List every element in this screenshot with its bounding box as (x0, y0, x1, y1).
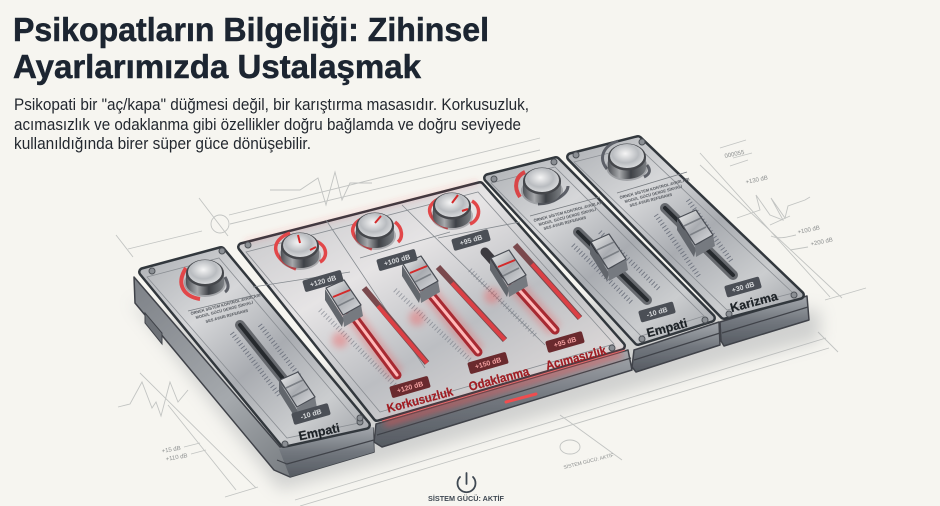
fader: Korkusuzluk (320, 280, 427, 385)
bottom value tag 1 (389, 376, 431, 398)
top value tag 1: +120 dB (309, 275, 337, 289)
fader (232, 325, 317, 419)
channel name: Empati (645, 316, 689, 340)
scale labels right: +130 dB (745, 175, 768, 186)
bottom value tag 1: +120 dB (396, 381, 424, 395)
knob arc (603, 141, 649, 177)
value tag: -10 dB (300, 409, 323, 421)
knob arc (516, 172, 525, 197)
top value tag 2: +100 dB (383, 254, 411, 268)
fader (656, 200, 733, 278)
knob arcs (276, 197, 479, 269)
shadow (130, 300, 820, 490)
intro text: kullanıldığında birer süper güce dönüşebilir. (14, 135, 311, 153)
waveform top (270, 172, 372, 205)
scale labels right: +200 dB (810, 237, 833, 248)
knob 1 (279, 232, 321, 270)
waveform left (118, 382, 188, 416)
channel name Acımasızlık: Acımasızlık (544, 343, 608, 373)
waveform right (737, 195, 810, 220)
description text: MODÜL GÜCÜ DENGE SİNYALİ (624, 184, 683, 204)
intro text: acımasızlık ve odaklanma gibi özellikler doğru bağlamda ve doğru seviyede (14, 116, 521, 134)
channel name: Karizma (729, 289, 780, 315)
scale labels right (724, 150, 833, 248)
description text: SES AYARI REFERANS (629, 192, 673, 208)
fader: Acımasızlık (470, 245, 580, 335)
bottom value tag 2: +150 dB (474, 357, 502, 371)
value tag: -10 dB (646, 307, 669, 319)
scale labels left: +110 dB (165, 453, 188, 463)
top value tag 1 (302, 270, 344, 292)
fader (573, 232, 660, 303)
panel: right module Karizma (571, 139, 809, 346)
knob (521, 168, 563, 205)
panel: left module Empati (134, 248, 374, 477)
technical drawing lines (116, 138, 866, 506)
description text: MODÜL GÜCÜ DENGE SİNYALİ (538, 207, 597, 227)
knob (606, 144, 648, 181)
LED (506, 394, 536, 402)
icon: power (458, 473, 476, 492)
scale labels left: +15 dB (161, 446, 181, 455)
top value tag 2 (376, 249, 418, 271)
value tag (638, 301, 676, 323)
channel name: Empati (297, 421, 341, 443)
description text: SES AYARI REFERANS (543, 215, 587, 231)
system status caption: SİSTEM GÜCÜ: AKTİF (428, 494, 505, 503)
description text: ÖRNEK SİSTEM KONTROL AYARLARI (190, 292, 261, 316)
panel: module Empati 2 (488, 159, 720, 372)
value tag (724, 276, 762, 298)
scale labels right: +100 dB (797, 225, 820, 236)
description text: ÖRNEK SİSTEM KONTROL AYARLARI (533, 199, 604, 223)
channel name Korkusuzluk: Korkusuzluk (385, 385, 455, 416)
top value tag 3: +95 dB (459, 234, 483, 248)
intro text: Psikopati bir "aç/kapa" düğmesi değil, bir karıştırma masasıdır. Korkusuzluk, (14, 96, 529, 114)
intro text (14, 96, 529, 153)
scale labels right: 000055 (724, 150, 746, 160)
title (13, 11, 489, 85)
small system annotation: SİSTEM GÜCÜ: AKTİF (563, 452, 614, 471)
title: Ayarlarımızda Ustalaşmak (13, 48, 422, 85)
knob 3 (431, 192, 473, 230)
description text: SES AYARI REFERANS (205, 308, 249, 324)
bottom value tag 3 (545, 331, 585, 353)
description text: ÖRNEK SİSTEM KONTROL AYARLARI (619, 176, 690, 200)
description text: MODÜL GÜCÜ DENGE SİNYALİ (195, 300, 254, 320)
channel name Odaklanma: Odaklanma (467, 364, 532, 394)
knob arc (181, 268, 200, 299)
side port (145, 313, 162, 344)
value tag (291, 403, 331, 425)
bottom value tag 3: +95 dB (553, 336, 577, 350)
knob 2 (354, 212, 396, 250)
red edge glow (385, 354, 622, 424)
title: Psikopatların Bilgeliği: Zihinsel (13, 11, 489, 48)
knob (184, 260, 226, 297)
scale labels left (161, 443, 206, 463)
panel: central red module (242, 182, 632, 447)
fader: Odaklanma (395, 256, 505, 360)
top value tag 3 (451, 229, 491, 251)
value tag: +30 dB (731, 281, 755, 295)
bottom value tag 2 (467, 352, 509, 374)
